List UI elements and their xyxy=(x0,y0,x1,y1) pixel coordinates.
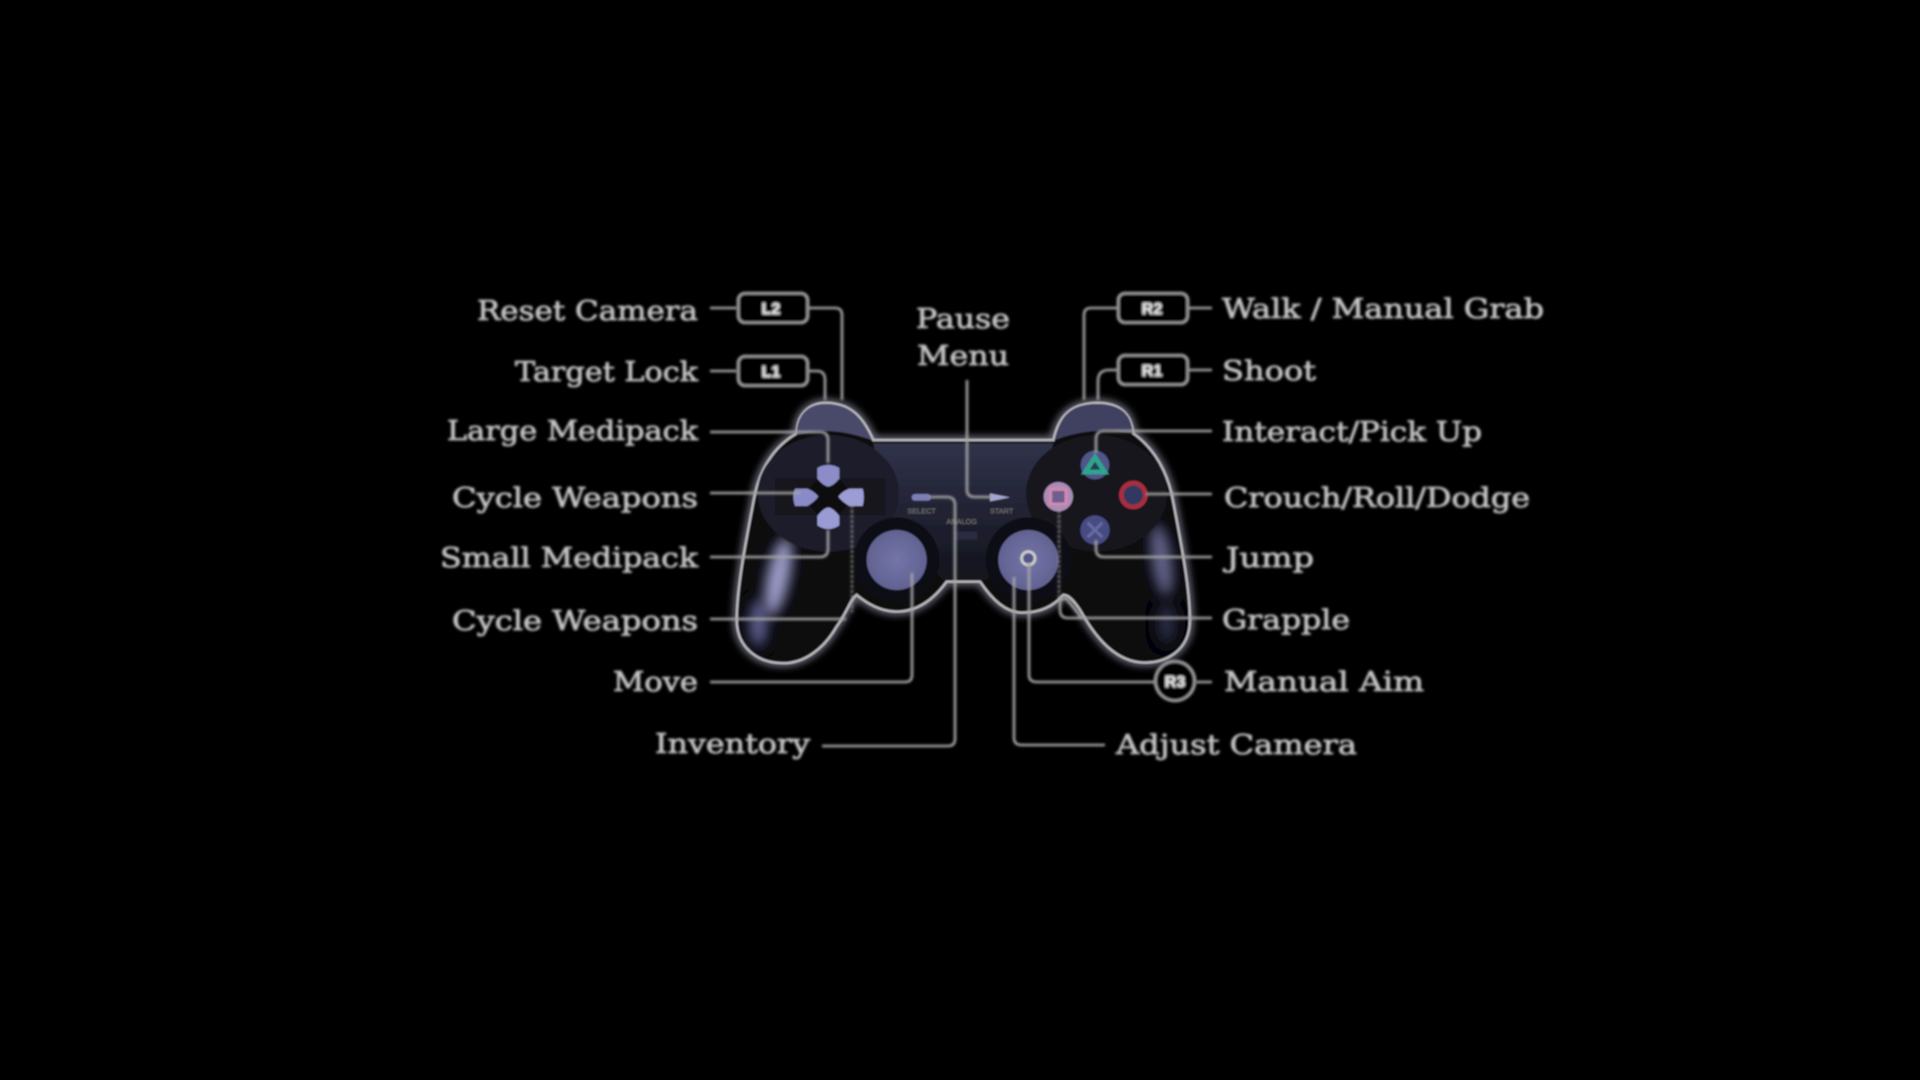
body outline glow xyxy=(737,403,1190,663)
d-pad down xyxy=(817,507,839,529)
start label: START xyxy=(990,506,1014,515)
line: pause menu xyxy=(967,380,992,497)
label: Grapple: Grapple xyxy=(1222,605,1350,636)
left stick xyxy=(867,530,927,590)
right grip lower sheen xyxy=(1159,603,1175,643)
d-pad up xyxy=(817,465,839,487)
d-pad left xyxy=(793,489,818,506)
line: crouch xyxy=(1146,493,1212,495)
line: cycle weapons down xyxy=(710,618,846,620)
label: Manual Aim: Manual Aim xyxy=(1224,667,1424,698)
body shell xyxy=(737,403,1190,663)
controller body xyxy=(737,403,1190,663)
leader lines xyxy=(710,308,1212,746)
L1 tag: L1 xyxy=(762,364,780,381)
R1 tag: R1 xyxy=(1142,363,1162,380)
label: Large Medipack: Large Medipack xyxy=(447,416,699,447)
label: Move: Move xyxy=(613,667,698,698)
triangle button xyxy=(1081,451,1109,479)
line: large medipack xyxy=(710,432,828,463)
label: Pause Menu xyxy=(916,304,1010,372)
L2 tag: L2 xyxy=(762,301,780,318)
R3 tag: R3 xyxy=(1165,674,1185,691)
right stick ring xyxy=(986,517,1071,603)
button tags xyxy=(738,293,1195,701)
line: d-pad right drop xyxy=(851,505,853,612)
label: Small Medipack: Small Medipack xyxy=(440,543,699,574)
line: square button drop xyxy=(1058,505,1060,600)
L1 tag xyxy=(738,356,808,386)
start button xyxy=(990,493,1010,501)
analog indicator xyxy=(954,532,977,540)
R2 tag: R2 xyxy=(1142,301,1162,318)
left grip sheen xyxy=(759,535,798,618)
line: reset camera xyxy=(710,308,842,400)
triangle symbol xyxy=(1085,457,1105,472)
select button xyxy=(912,494,931,501)
square button xyxy=(1044,482,1073,511)
line: grapple xyxy=(1060,598,1212,618)
cross symbol xyxy=(1088,523,1102,537)
line: manual aim xyxy=(1029,563,1212,682)
left stick ring xyxy=(854,517,939,603)
left d-pad disc xyxy=(758,435,899,552)
line: cycle weapons up xyxy=(710,492,800,494)
line: small medipack xyxy=(710,530,828,557)
d-pad center xyxy=(808,477,848,517)
line: walk grab xyxy=(1084,308,1212,400)
center panel xyxy=(873,443,1053,580)
select label: SELECT xyxy=(907,506,936,515)
label: Cycle Weapons lower: Cycle Weapons xyxy=(452,606,698,637)
line: inventory xyxy=(822,497,955,746)
circle button xyxy=(1121,483,1145,507)
label: Shoot: Shoot xyxy=(1222,356,1316,387)
label: Cycle Weapons: Cycle Weapons xyxy=(452,483,698,514)
left grip lower sheen xyxy=(750,600,767,647)
label: Reset Camera: Reset Camera xyxy=(477,296,698,327)
square symbol xyxy=(1051,489,1066,504)
right grip sheen xyxy=(1147,522,1177,598)
R3 marker xyxy=(1022,552,1035,565)
label: Walk / Manual Grab: Walk / Manual Grab xyxy=(1222,294,1544,325)
labels xyxy=(440,294,1544,761)
line: interact xyxy=(1096,431,1212,453)
label: Jump: Jump xyxy=(1222,543,1314,574)
label: Adjust Camera: Adjust Camera xyxy=(1115,730,1357,761)
R1 tag xyxy=(1118,355,1188,385)
line: target lock xyxy=(710,371,825,400)
R3 tag xyxy=(1155,661,1195,701)
label: Crouch/Roll/Dodge: Crouch/Roll/Dodge xyxy=(1224,483,1530,514)
L2 tag xyxy=(738,293,808,323)
d-pad recess xyxy=(775,478,885,515)
line: adjust camera xyxy=(1014,577,1105,745)
d-pad right xyxy=(838,489,864,506)
cross button xyxy=(1080,515,1110,545)
right button disc xyxy=(1026,435,1167,552)
label: Inventory: Inventory xyxy=(655,729,811,760)
R2 tag xyxy=(1118,293,1188,323)
label: Pause Menu: Pause xyxy=(916,304,1010,335)
line: move xyxy=(710,573,912,682)
left shoulder trigger xyxy=(797,404,872,440)
label: Pause Menu: Menu xyxy=(917,341,1009,372)
label: Interact/Pick Up: Interact/Pick Up xyxy=(1222,417,1482,448)
line: jump xyxy=(1096,540,1212,557)
right stick xyxy=(998,530,1058,590)
label: Target Lock: Target Lock xyxy=(515,357,699,388)
line: shoot xyxy=(1098,370,1212,400)
analog label: ANALOG xyxy=(946,517,977,526)
right shoulder trigger xyxy=(1055,404,1133,440)
